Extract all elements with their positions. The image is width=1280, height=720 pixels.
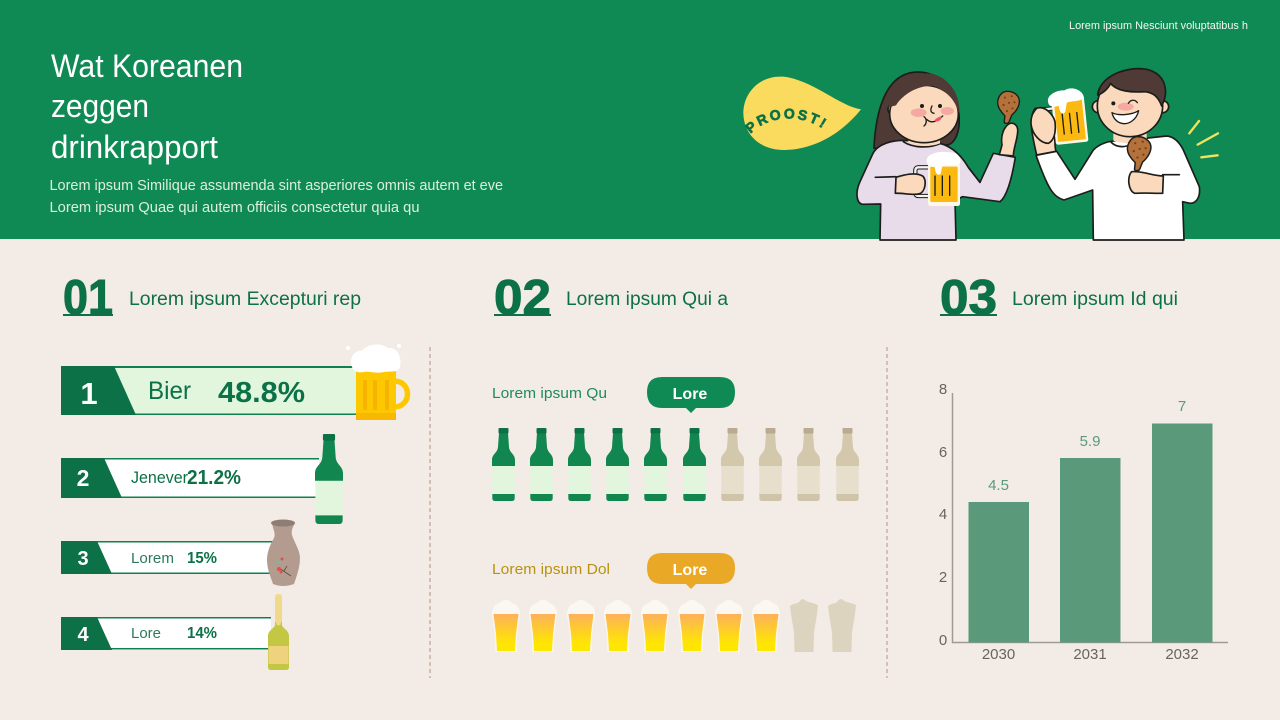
rank 3 bar: lorem: Lorem — [131, 550, 174, 567]
value labels: 7 — [1178, 398, 1186, 415]
panel: ranking — [61, 344, 408, 670]
label: beer: Lorem ipsum Dol — [492, 561, 610, 578]
rank 1 bar: bier: Bier — [148, 377, 191, 405]
section heading 01: 01 — [63, 271, 113, 325]
subtitle text: Lorem ipsum Similique assumenda sint asperiores omnis autem et eve — [50, 177, 503, 194]
man's hand with chicken — [1127, 137, 1179, 193]
man's hand on mug — [1031, 108, 1055, 143]
section heading 03: 03 — [940, 271, 997, 325]
speech bubble: proost: PROOST! — [744, 108, 827, 134]
bars — [968, 424, 1212, 642]
woman — [857, 72, 1019, 240]
icon: ceramic vase — [267, 520, 300, 586]
year labels: 2031 — [1073, 646, 1107, 663]
rank 3 bar: lorem: 15% — [187, 550, 217, 567]
callout: amber pill — [647, 553, 735, 589]
woman's hand on mug — [895, 174, 925, 194]
bottle row — [492, 428, 859, 501]
woman's raised hand and chicken — [998, 91, 1019, 156]
icon: green bottle — [315, 434, 343, 524]
value labels: 5.9 — [1080, 433, 1100, 450]
callout: green pill — [647, 377, 735, 413]
section heading 01 — [63, 271, 361, 325]
illustration: friends toasting — [743, 68, 1220, 241]
icon: sparkling wine bottle — [268, 594, 289, 670]
y axis labels: 2 — [939, 569, 947, 586]
rank 1 bar: bier: 1 — [80, 376, 98, 411]
value labels: 4.5 — [988, 477, 1009, 494]
title: Wat Koreanen — [51, 48, 243, 84]
rank 2 bar: jenever: 2 — [77, 465, 89, 491]
title — [51, 48, 243, 165]
year labels: 2030 — [982, 646, 1015, 663]
header band — [0, 0, 1280, 239]
bar chart — [939, 381, 1228, 663]
rank 4 bar: lore: 4 — [77, 624, 89, 646]
section heading 02: 02 — [494, 271, 551, 325]
subtitle text: Lorem ipsum Quae qui autem officiis consectetur quia qu — [50, 199, 420, 216]
section heading 01: Lorem ipsum Excepturi rep — [129, 289, 361, 310]
icon: beer mug — [346, 344, 408, 420]
rank 4 bar: lore — [61, 617, 271, 650]
rank 3 bar: lorem — [61, 541, 273, 574]
subtitle text — [50, 177, 503, 216]
year labels — [982, 646, 1199, 663]
man's mug — [1036, 87, 1089, 146]
rank 4 bar: lore: Lore — [131, 625, 161, 642]
section heading 03: Lorem ipsum Id qui — [1012, 289, 1178, 310]
icon: sparkle rays — [1189, 121, 1218, 157]
rank 2 bar: jenever: Jenever — [131, 468, 188, 487]
title: drinkrapport — [51, 129, 218, 165]
section heading 02 — [494, 271, 728, 325]
rank 3 bar: lorem: 3 — [77, 548, 89, 570]
rank 4 bar: lore: 14% — [187, 625, 217, 642]
y axis labels: 6 — [939, 444, 947, 461]
callout: amber pill: Lore — [673, 562, 707, 579]
callout: green pill: Lore — [673, 386, 707, 403]
beer glass row — [492, 599, 856, 652]
label: bottles: Lorem ipsum Qu — [492, 385, 607, 402]
y axis labels: 0 — [939, 632, 947, 649]
y axis labels: 8 — [939, 381, 947, 398]
y axis labels: 4 — [939, 506, 947, 523]
rank 2 bar: jenever: 21.2% — [187, 467, 241, 489]
panel: beer pictogram — [492, 553, 856, 652]
speech bubble: proost — [743, 76, 861, 150]
top right note: Lorem ipsum Nesciunt voluptatibus h — [1069, 20, 1248, 32]
woman's mug — [915, 152, 960, 206]
value labels — [988, 398, 1186, 494]
panel: bottle pictogram — [492, 377, 859, 501]
rank 2 bar: jenever — [61, 458, 319, 498]
section heading 02: Lorem ipsum Qui a — [566, 289, 728, 310]
y axis labels — [939, 381, 947, 649]
rank 1 bar: bier — [61, 366, 357, 415]
section heading 03 — [940, 271, 1178, 325]
title: zeggen — [51, 88, 149, 124]
rank 1 bar: bier: 48.8% — [218, 377, 305, 409]
man — [1031, 69, 1200, 240]
year labels: 2032 — [1165, 646, 1199, 663]
